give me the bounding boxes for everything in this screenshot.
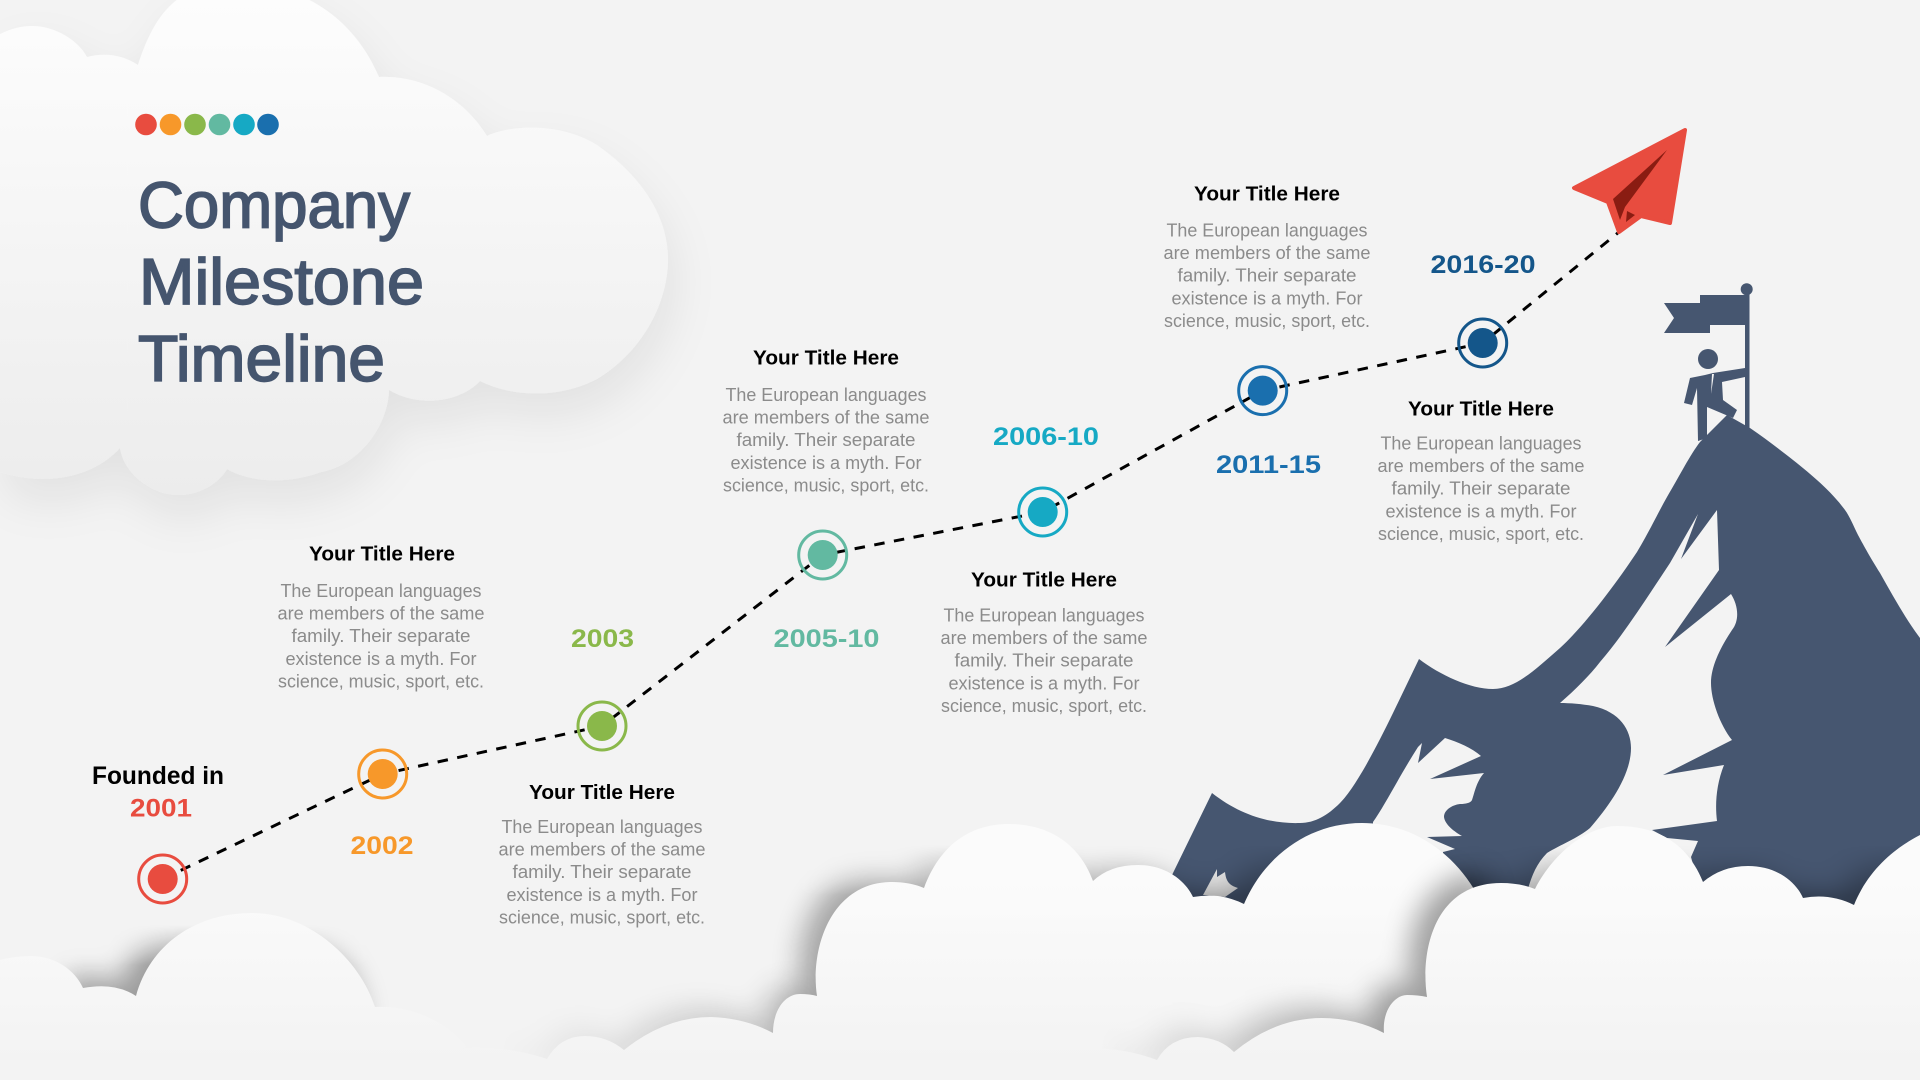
- text block: 2016-20: Your Title Here: [1408, 398, 1554, 420]
- shadow of centre cloud behind: [781, 850, 1276, 1004]
- text block: 2011-15: are members of the same: [1164, 242, 1370, 263]
- label: founded in 2001: 2001: [130, 794, 192, 822]
- snow patch in shadow: [1203, 869, 1238, 897]
- text block: 2002: are members of the same: [278, 603, 484, 624]
- text block: 2011-15: family. Their separate: [1178, 265, 1356, 286]
- text block: 2003: family. Their separate: [512, 861, 692, 882]
- title: [138, 168, 424, 395]
- cloud: centre: [382, 823, 1474, 1080]
- text block: 2005-10: family. Their separate: [736, 429, 916, 450]
- year 2011-15: 2011-15: [1216, 451, 1321, 479]
- text block: 2003: are members of the same: [498, 839, 706, 860]
- text block: 2002: family. Their separate: [292, 625, 470, 646]
- text block: 2005-10: Your Title Here: [753, 348, 899, 370]
- text block: 2002: Your Title Here: [309, 544, 455, 566]
- text block: 2003: The European languages: [502, 816, 702, 837]
- node 2006-10: [1019, 488, 1067, 536]
- text block: 2016-20: family. Their separate: [1392, 478, 1570, 499]
- label: founded in 2001: Founded in: [92, 762, 224, 790]
- text block: 2016-20: The European languages: [1380, 432, 1582, 454]
- cloud: bottom right: [989, 826, 1920, 1080]
- text block: 2011-15: The European languages: [1166, 220, 1368, 240]
- text block: 2003: [498, 782, 706, 927]
- year 2006-10: 2006-10: [993, 423, 1099, 451]
- icon: flag: [1664, 283, 1753, 429]
- mountain: [1150, 415, 1920, 1000]
- text block: 2006-10: are members of the same: [940, 627, 1148, 648]
- text block: 2005-10: [722, 348, 930, 495]
- colour dots: [135, 114, 279, 135]
- text block: 2002: The European languages: [280, 580, 482, 601]
- label: founded in 2001: [92, 762, 224, 822]
- text block: 2002: existence is a myth. For: [286, 648, 476, 669]
- text block: 2003: science, music, sport, etc.: [499, 906, 705, 927]
- shadow of centre cloud on left cloud: [554, 975, 814, 1050]
- top-left cloud: [0, 0, 668, 495]
- text block: 2011-15: science, music, sport, etc.: [1164, 310, 1370, 331]
- text block: 2003: existence is a myth. For: [506, 884, 698, 905]
- icon: paper plane: [1574, 130, 1685, 232]
- text block: 2016-20: [1378, 398, 1584, 544]
- shadow of right cloud on centre cloud: [1141, 862, 1492, 1060]
- node 2005-10: [799, 531, 847, 579]
- text block: 2003: Your Title Here: [529, 782, 675, 804]
- year 2005-10: 2005-10: [774, 625, 880, 653]
- text block: 2011-15: Your Title Here: [1194, 184, 1340, 206]
- text block: 2016-20: are members of the same: [1378, 455, 1584, 476]
- shadow of right cloud on mountain: [1464, 850, 1886, 905]
- text block: 2005-10: The European languages: [726, 384, 926, 405]
- title: Timeline: [138, 322, 385, 395]
- text block: 2016-20: existence is a myth. For: [1386, 500, 1576, 521]
- cloud: bottom left: [0, 913, 467, 1080]
- node 2001: [139, 855, 187, 903]
- text block: 2011-15: existence is a myth. For: [1172, 287, 1362, 308]
- text block: 2002: science, music, sport, etc.: [278, 670, 484, 691]
- text block: 2006-10: family. Their separate: [954, 650, 1134, 671]
- title: Milestone: [139, 245, 424, 318]
- year 2003: 2003: [571, 625, 634, 653]
- text block: 2002: [278, 544, 484, 691]
- year 2002: 2002: [350, 832, 414, 860]
- node 2003: [578, 702, 626, 750]
- dashed timeline path: [163, 232, 1619, 879]
- text block: 2006-10: existence is a myth. For: [948, 672, 1140, 693]
- node 2002: [359, 750, 407, 798]
- text block: 2005-10: are members of the same: [722, 407, 930, 428]
- text block: 2006-10: [940, 570, 1148, 716]
- year 2016-20: 2016-20: [1430, 251, 1536, 279]
- title: Company: [138, 168, 410, 242]
- shadow of left cloud: [64, 929, 378, 1007]
- text block: 2005-10: science, music, sport, etc.: [723, 474, 929, 495]
- node 2011-15: [1239, 367, 1287, 415]
- text block: 2011-15: [1164, 184, 1370, 331]
- text block: 2016-20: science, music, sport, etc.: [1378, 523, 1584, 544]
- text block: 2006-10: The European languages: [944, 604, 1144, 626]
- text block: 2006-10: science, music, sport, etc.: [941, 695, 1147, 716]
- node 2016-20: [1459, 319, 1507, 367]
- icon: person on summit: [1684, 349, 1745, 441]
- text block: 2005-10: existence is a myth. For: [730, 452, 922, 473]
- text block: 2006-10: Your Title Here: [971, 570, 1117, 592]
